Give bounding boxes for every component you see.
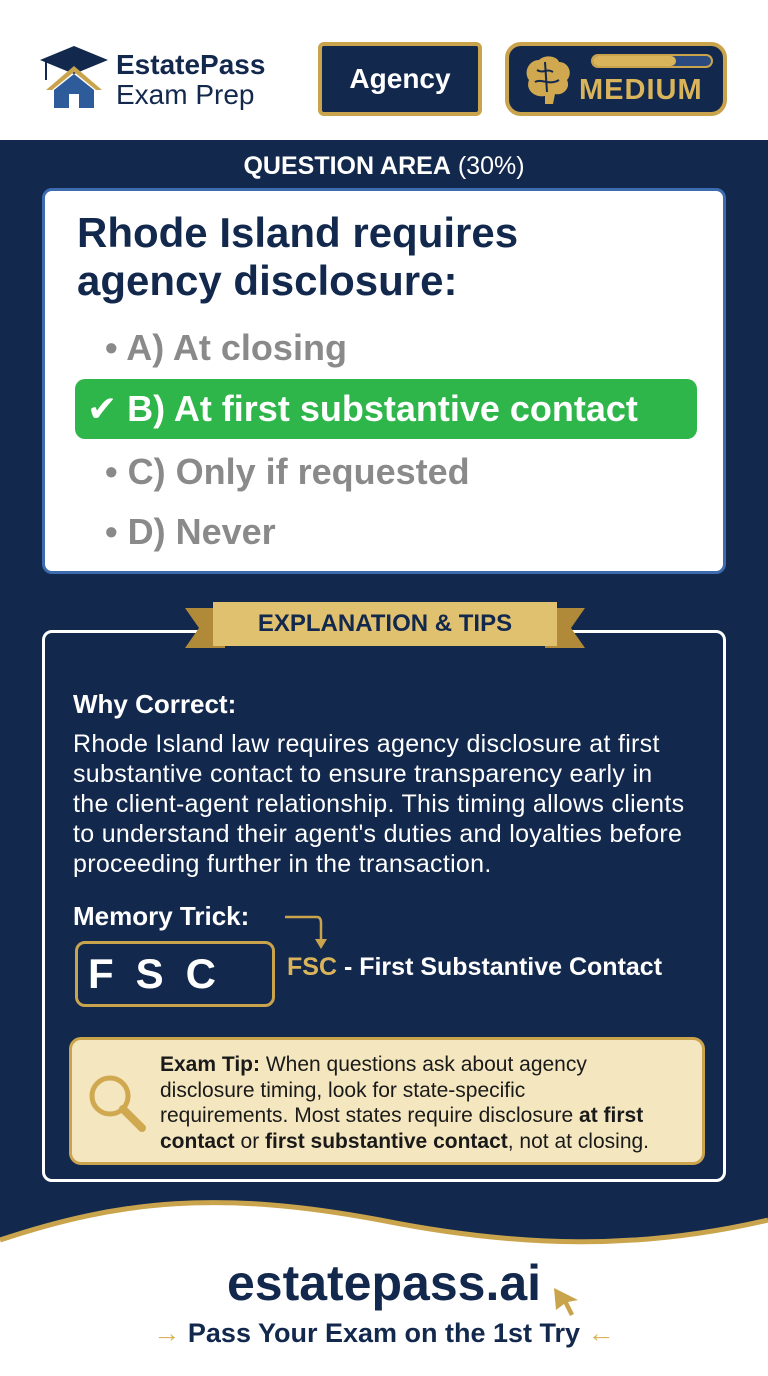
text: explanation: substantive contact to ensure transparency early in [73, 760, 652, 788]
text: explanation: to understand their agent's duties and loyalties before [73, 820, 682, 848]
callout: exam tip [69, 1037, 705, 1165]
icon: house with cap [40, 46, 108, 108]
option D: • D) Never [105, 511, 276, 552]
panel: explanation [42, 630, 726, 1182]
question text: Rhode Island requires [77, 209, 518, 256]
icon: magnifier [90, 1076, 146, 1132]
tagline: → Pass Your Exam on the 1st Try ← [153, 1318, 615, 1348]
option B correct: ✔ B) At first substantive contact [87, 388, 638, 429]
callout: exam tip: contact or first substantive contact, not at closing. [160, 1130, 649, 1152]
logo: EstatePass [116, 49, 265, 80]
question text [77, 209, 518, 304]
text: explanation: the client-agent relationship. This timing allows clients [73, 790, 684, 818]
icon: brain [526, 56, 570, 104]
text: explanation: Rhode Island law requires agency disclosure at first [73, 730, 660, 758]
badge: medium [505, 42, 727, 116]
text: explanation [73, 730, 684, 878]
panel: question card [42, 188, 726, 574]
footer url: estatepass.ai [227, 1255, 541, 1311]
heading: memory trick: Memory Trick: [73, 901, 249, 931]
callout: exam tip: disclosure timing, look for state-specific [160, 1078, 525, 1102]
option B correct [75, 379, 697, 439]
logo: Exam Prep [116, 79, 254, 110]
question text: agency disclosure: [77, 257, 457, 304]
icon: FSC box [75, 941, 275, 1007]
banner: explanation & tips [185, 602, 585, 648]
option A: • A) At closing [105, 327, 347, 368]
arrow [285, 916, 327, 949]
option C: • C) Only if requested [105, 451, 470, 492]
mnemonic text: FSC - First Substantive Contact [287, 953, 662, 981]
header [0, 0, 768, 140]
callout: exam tip: Exam Tip: When questions ask about agency [160, 1053, 587, 1076]
section label: question area: QUESTION AREA (30%) [243, 152, 525, 180]
icon: cursor [554, 1288, 578, 1316]
badge: Agency: Agency [349, 63, 451, 94]
text: explanation: proceeding further in the transaction. [73, 850, 492, 878]
banner: explanation & tips: EXPLANATION & TIPS [258, 610, 512, 637]
badge: Agency [318, 42, 482, 116]
icon: FSC box: FSC [88, 950, 238, 997]
badge: medium: MEDIUM [579, 74, 703, 106]
callout: exam tip: requirements. Most states require disclosure at first [160, 1104, 643, 1127]
logo [40, 46, 265, 110]
wave footer border [0, 1200, 768, 1250]
heading: why correct: Why Correct: [73, 689, 236, 719]
